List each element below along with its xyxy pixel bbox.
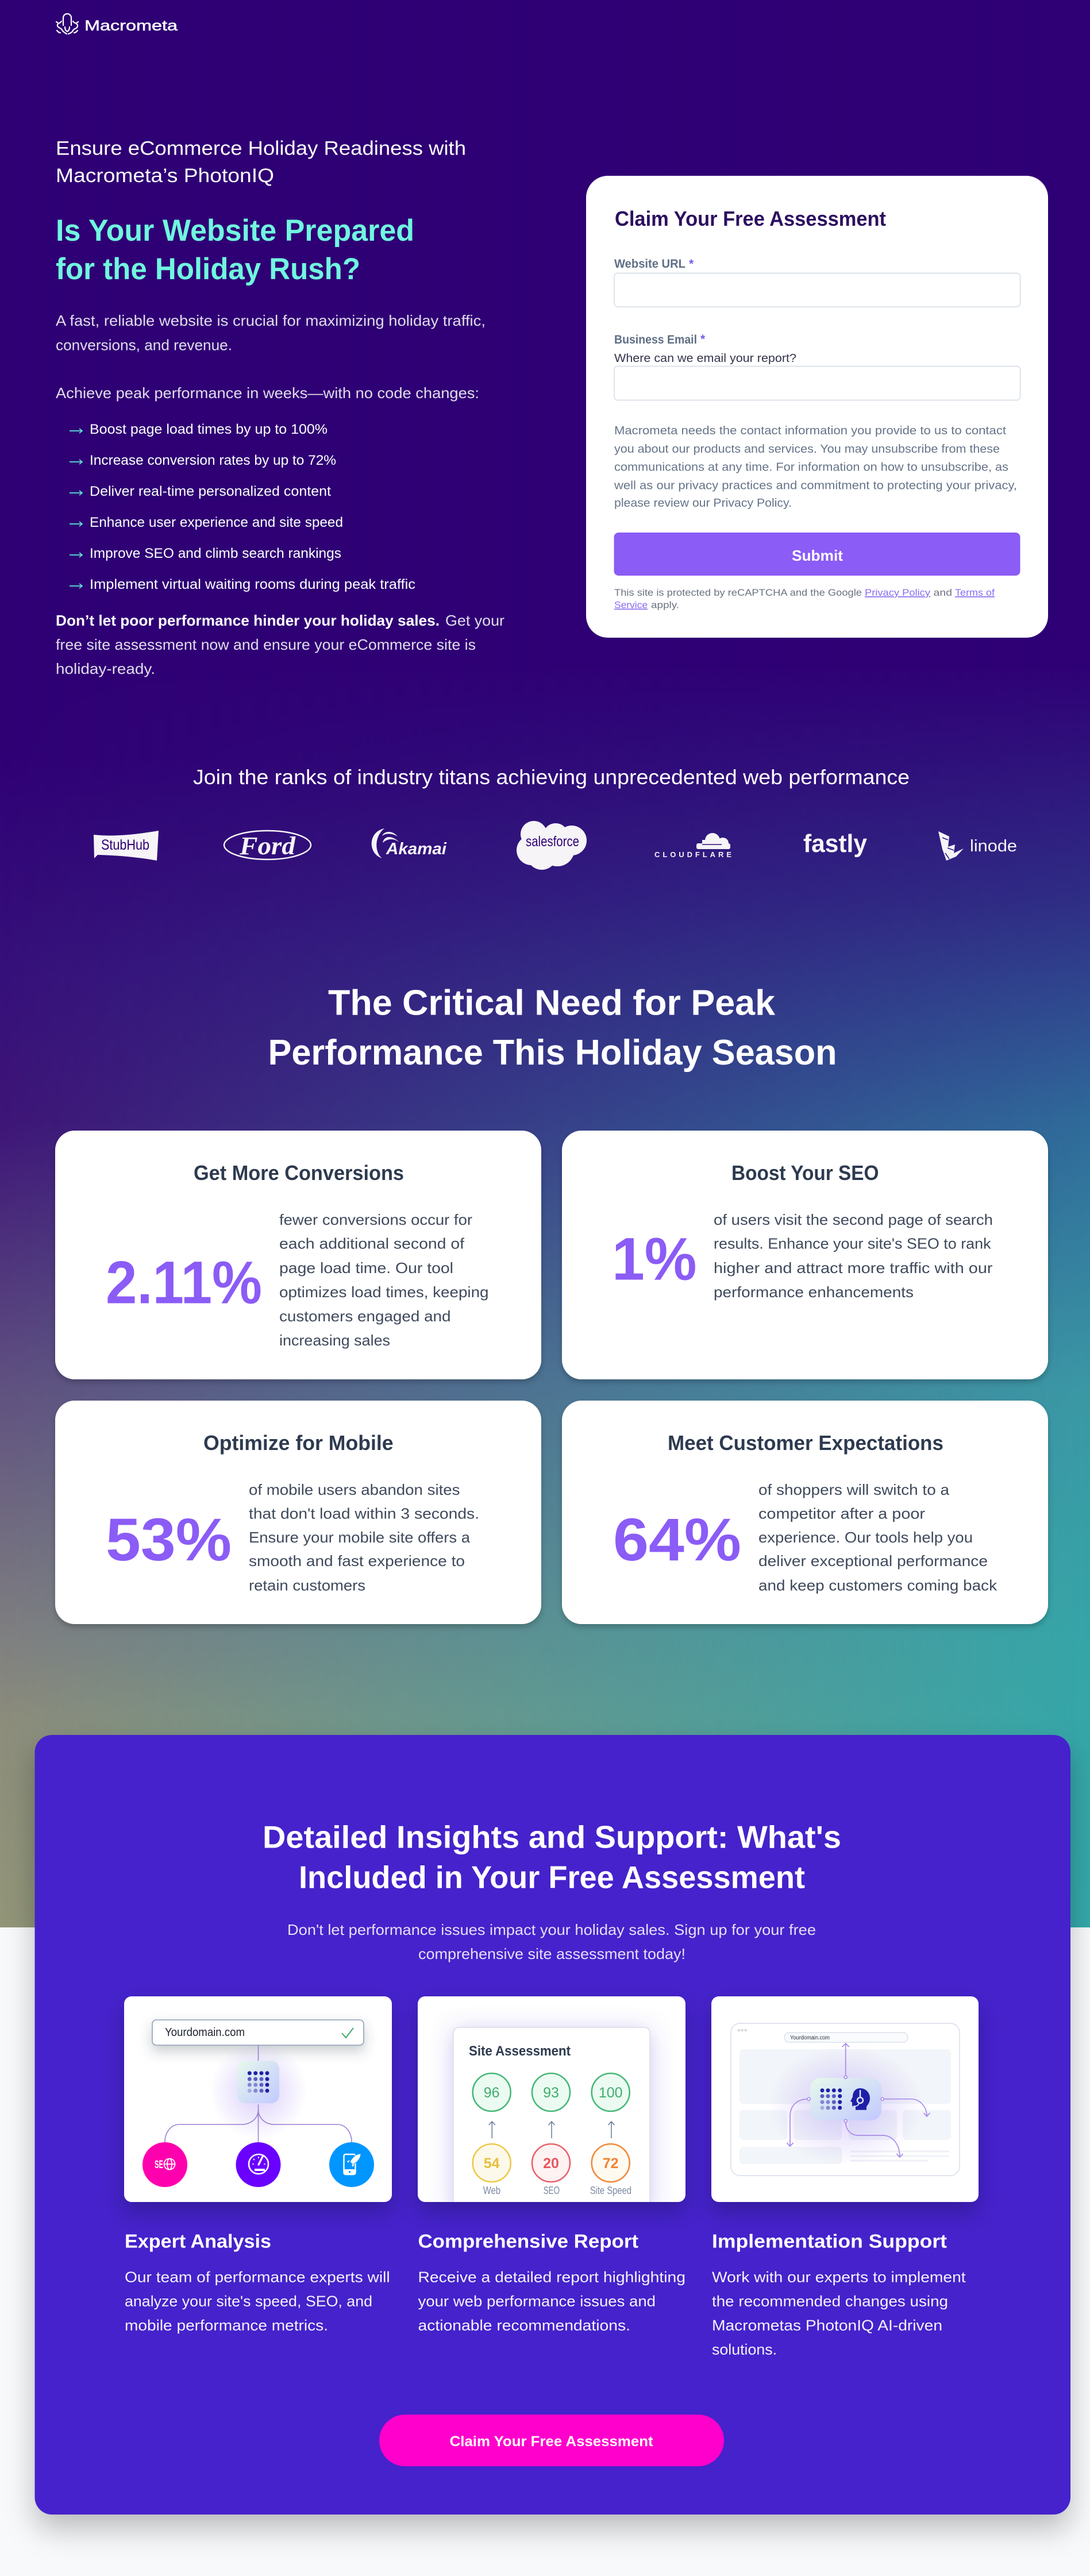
panel: Optimize for Mobile [55, 1401, 541, 1624]
card description: increasing sales [279, 1332, 390, 1349]
hero heading: Is Your Website Prepared [56, 214, 414, 248]
card description: and keep customers coming back [758, 1577, 997, 1594]
reCAPTCHA notice [614, 587, 995, 610]
logo: Cloudflare [654, 833, 731, 859]
column: implementation support: Macrometas PhotonIQ AI-driven [712, 2317, 942, 2334]
logo: Akamai [372, 828, 447, 858]
reCAPTCHA notice: and [933, 587, 952, 598]
logo: StubHub: StubHub [101, 837, 149, 853]
section subtitle: Don't let performance issues impact your holiday sales. Sign up for your free [287, 1921, 816, 1938]
field: business email: Where can we email your report? [614, 352, 796, 365]
list item 3: Deliver real-time personalized content [90, 484, 331, 499]
reCAPTCHA notice: apply. [651, 600, 679, 610]
icon: product tile [237, 2061, 279, 2103]
stat: 1%: 1% [612, 1226, 697, 1293]
call-to-action button [379, 2415, 724, 2466]
image card: comprehensive report [418, 1996, 685, 2209]
improvement arrows [489, 2122, 615, 2138]
card description: deliver exceptional performance [758, 1552, 988, 1569]
stat: 2.11%: 2.11% [106, 1250, 262, 1317]
reCAPTCHA notice: This site is protected by reCAPTCHA and the Google [614, 587, 862, 598]
score before: 72: 72 [603, 2155, 619, 2172]
hero closing text [56, 612, 504, 677]
score after: 100 [592, 2073, 630, 2111]
logo: Linode [938, 831, 1017, 861]
column: expert analysis: mobile performance metrics. [125, 2317, 328, 2334]
hero intro text [56, 312, 486, 354]
card description: of users visit the second page of search [714, 1211, 993, 1228]
column: comprehensive report: your web performance issues and [418, 2293, 656, 2310]
score labels: Web [483, 2185, 500, 2196]
hero intro text: A fast, reliable website is crucial for maximizing holiday traffic, [56, 312, 486, 329]
browser mockup [731, 2023, 960, 2176]
card description: Ensure your mobile site offers a [249, 1529, 471, 1546]
icon: support tile [810, 2078, 881, 2120]
field: business email [614, 333, 1020, 400]
score labels: SEO [544, 2185, 560, 2196]
privacy notice: you about our products and services. You may unsubscribe from these [614, 443, 1000, 456]
score before: 72 [592, 2144, 630, 2182]
section subtitle [287, 1921, 816, 1962]
hero intro text: conversions, and revenue. [56, 337, 232, 354]
domain input [152, 2020, 364, 2045]
achieve line: Achieve peak performance in weeks—with no code changes: [56, 384, 479, 402]
logo: Salesforce: salesforce [526, 834, 579, 850]
card description [758, 1481, 997, 1594]
icon: SEO circle: SE [155, 2159, 163, 2171]
logo: Salesforce [517, 821, 587, 870]
column: expert analysis: analyze your site's speed, SEO, and [125, 2293, 372, 2310]
score after: 96: 96 [484, 2085, 500, 2101]
card description: customers engaged and [279, 1308, 450, 1325]
column: comprehensive report: actionable recommendations. [418, 2317, 630, 2334]
page background [0, 0, 1090, 1927]
hero eyebrow: Macrometa’s PhotonIQ [56, 165, 274, 187]
list item 1: Boost page load times by up to 100% [90, 422, 328, 437]
card description: each additional second of [279, 1235, 465, 1252]
hero closing text: free site assessment now and ensure your eCommerce site is [56, 636, 476, 653]
privacy notice [614, 425, 1017, 510]
section heading [263, 1819, 841, 1895]
stat: 64%: 64% [613, 1506, 741, 1574]
score before: 20: 20 [543, 2155, 559, 2172]
column: expert analysis: Our team of performance experts will [125, 2268, 390, 2285]
call-to-action button: Claim Your Free Assessment [450, 2434, 653, 2450]
list item 2: Increase conversion rates by up to 72% [90, 453, 336, 468]
card description: higher and attract more traffic with our [714, 1259, 993, 1277]
card description: competitor after a poor [758, 1505, 925, 1522]
column: comprehensive report: Receive a detailed report highlighting [418, 2268, 685, 2285]
logo: Ford [224, 831, 311, 860]
card description [714, 1211, 993, 1301]
reCAPTCHA notice: Terms of [955, 587, 995, 598]
icon: SEO circle [142, 2142, 187, 2187]
submit button: Submit [792, 547, 843, 564]
column: comprehensive report: Comprehensive Report [418, 2231, 638, 2252]
card description [249, 1481, 479, 1594]
logo: StubHub [94, 831, 159, 861]
card description: of mobile users abandon sites [249, 1481, 460, 1498]
score after: 93: 93 [543, 2085, 559, 2101]
hero eyebrow [56, 138, 466, 187]
panel: assessment form [586, 176, 1048, 638]
support arrows [787, 2043, 930, 2157]
column: implementation support: the recommended changes using [712, 2293, 948, 2310]
icon: octopus mark [56, 14, 78, 34]
reCAPTCHA notice: Privacy Policy [865, 587, 931, 598]
logo: Akamai: Akamai [386, 840, 447, 858]
customer logos [94, 821, 1017, 870]
column: comprehensive report [418, 2231, 685, 2334]
hero eyebrow: Ensure eCommerce Holiday Readiness with [56, 138, 466, 160]
card description: retain customers [249, 1577, 365, 1594]
hero heading: for the Holiday Rush? [56, 252, 360, 286]
logo: Cloudflare: CLOUDFLARE [654, 850, 731, 859]
card description: fewer conversions occur for [279, 1211, 472, 1228]
icon: mobile rocket circle [329, 2142, 374, 2187]
score labels: Site Speed [590, 2185, 631, 2196]
card description: experience. Our tools help you [758, 1529, 973, 1546]
form title: Claim Your Free Assessment [615, 207, 886, 230]
logo: Ford: Ford [239, 832, 296, 860]
logo wordmark: Macrometa [84, 18, 178, 34]
column: implementation support: Work with our experts to implement [712, 2268, 966, 2285]
reCAPTCHA notice: Service [614, 600, 648, 610]
list item 6: Implement virtual waiting rooms during peak traffic [90, 577, 415, 592]
hero closing text: holiday-ready. [56, 660, 155, 677]
column: implementation support [712, 2231, 966, 2358]
logo: Linode: linode [970, 837, 1017, 855]
domain input: Yourdomain.com [165, 2026, 245, 2039]
column: expert analysis: Expert Analysis [125, 2231, 271, 2252]
section heading: critical need: The Critical Need for Peak [328, 984, 776, 1023]
privacy notice: well as our privacy practices and commitment to protecting your privacy, [614, 479, 1017, 492]
hero heading [56, 214, 414, 286]
score labels [483, 2186, 631, 2196]
card title: Meet Customer Expectations [668, 1431, 943, 1455]
benefits list [70, 422, 415, 592]
list item 4: Enhance user experience and site speed [90, 515, 343, 530]
panel: Meet Customer Expectations [562, 1401, 1048, 1624]
site assessment sheet [453, 2027, 650, 2209]
card description: optimizes load times, keeping [279, 1283, 488, 1301]
field: business email: Business Email [614, 333, 697, 346]
panel: Boost Your SEO [562, 1131, 1048, 1379]
submit button [614, 533, 1020, 576]
icon: speed gauge circle [236, 2142, 280, 2187]
column: implementation support: solutions. [712, 2341, 777, 2358]
panel: Get More Conversions [55, 1131, 541, 1379]
card title: Optimize for Mobile [203, 1431, 394, 1455]
card description: performance enhancements [714, 1283, 914, 1301]
image card: expert analysis diagram [124, 1996, 392, 2202]
stat: 53%: 53% [106, 1506, 232, 1574]
list item 5: Improve SEO and climb search rankings [90, 546, 341, 561]
logo: fastly: fastly [803, 830, 867, 858]
card description: results. Enhance your site's SEO to rank [714, 1235, 992, 1252]
section heading: critical need: Performance This Holiday Season [268, 1033, 837, 1073]
card title: Boost Your SEO [731, 1161, 879, 1185]
section heading: Included in Your Free Assessment [299, 1860, 805, 1895]
privacy notice: Macrometa needs the contact information you provide to us to contact [614, 425, 1006, 437]
score before: 54 [473, 2144, 511, 2182]
trusted-by heading: Join the ranks of industry titans achieving unprecedented web performance [193, 765, 910, 789]
field: website URL: Website URL [614, 257, 685, 271]
site assessment sheet: Site Assessment [469, 2043, 571, 2059]
logo: Macrometa [56, 14, 178, 34]
hero closing text: Don’t let poor performance hinder your holiday sales. [56, 612, 440, 629]
score before: 54: 54 [484, 2155, 500, 2172]
column: expert analysis [125, 2231, 390, 2334]
card title: Get More Conversions [194, 1161, 404, 1185]
card description: that don't load within 3 seconds. [249, 1505, 479, 1522]
privacy notice: communications at any time. For information on how to unsubscribe, as [614, 461, 1008, 473]
connector lines [165, 2045, 352, 2142]
section heading: Detailed Insights and Support: What's [263, 1819, 841, 1855]
section subtitle: comprehensive site assessment today! [418, 1945, 685, 1962]
browser mockup: Yourdomain.com [790, 2035, 830, 2041]
score after: 93 [532, 2073, 570, 2111]
field: website URL: * [689, 257, 694, 271]
field: website URL [614, 257, 1020, 307]
score after: 96 [473, 2073, 511, 2111]
score after: 100: 100 [599, 2085, 623, 2101]
image card: implementation support [711, 1996, 979, 2202]
card description: smooth and fast experience to [249, 1552, 465, 1569]
card description: of shoppers will switch to a [758, 1481, 950, 1498]
field: business email: * [700, 333, 706, 346]
score before: 20 [532, 2144, 570, 2182]
section heading: critical need [268, 984, 837, 1073]
card description [279, 1211, 488, 1349]
card description: page load time. Our tool [279, 1259, 453, 1277]
panel: included in assessment [34, 1735, 1070, 2515]
privacy notice: please review our Privacy Policy. [614, 497, 792, 510]
column: implementation support: Implementation Support [712, 2231, 947, 2252]
hero closing text: Get your [445, 612, 504, 629]
